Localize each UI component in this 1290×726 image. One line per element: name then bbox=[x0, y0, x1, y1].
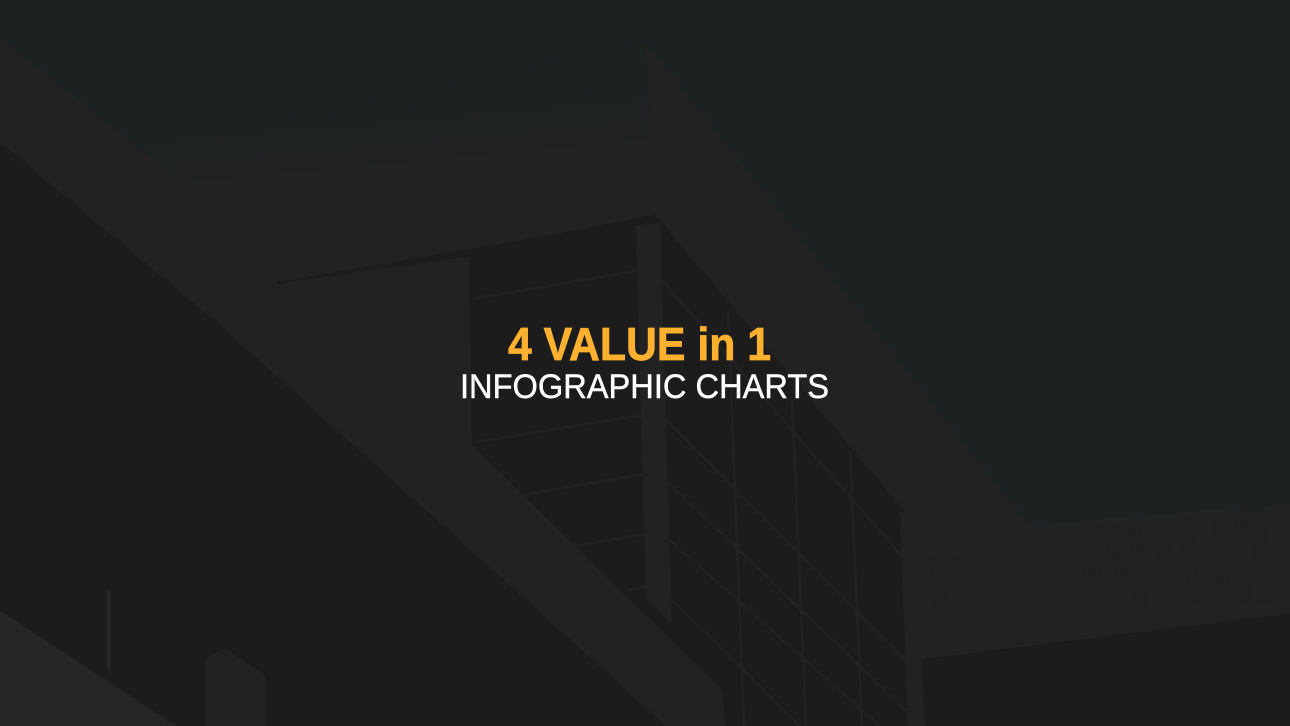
bottom left post bbox=[107, 592, 110, 670]
bottom left wall block bbox=[205, 648, 265, 726]
wall panel bbox=[277, 257, 472, 445]
slanted roof edge bbox=[646, 42, 1095, 655]
bottom left dark gap bbox=[88, 610, 106, 668]
facade grid lines bbox=[662, 280, 918, 726]
headline: 4 VALUE in 1: 4 VALUE in 1 bbox=[508, 318, 771, 370]
horizontal window rails bbox=[472, 271, 646, 590]
subheadline: INFOGRAPHIC CHARTS: INFOGRAPHIC CHARTS bbox=[460, 368, 829, 406]
left diagonal beam bbox=[0, 33, 725, 726]
right balcony wall bbox=[905, 503, 1290, 660]
window pillar bbox=[636, 223, 672, 625]
roof shadow line bbox=[277, 216, 657, 283]
dark window block bbox=[469, 217, 922, 726]
bottom left ledge bbox=[0, 612, 175, 726]
balcony railing texture bbox=[935, 508, 1263, 645]
roof underside bbox=[134, 42, 657, 282]
lower sky tone bbox=[800, 200, 1290, 530]
lower right floor bbox=[925, 613, 1290, 726]
corner post on the right bbox=[900, 510, 935, 726]
bottom left glass railing bbox=[0, 558, 190, 726]
